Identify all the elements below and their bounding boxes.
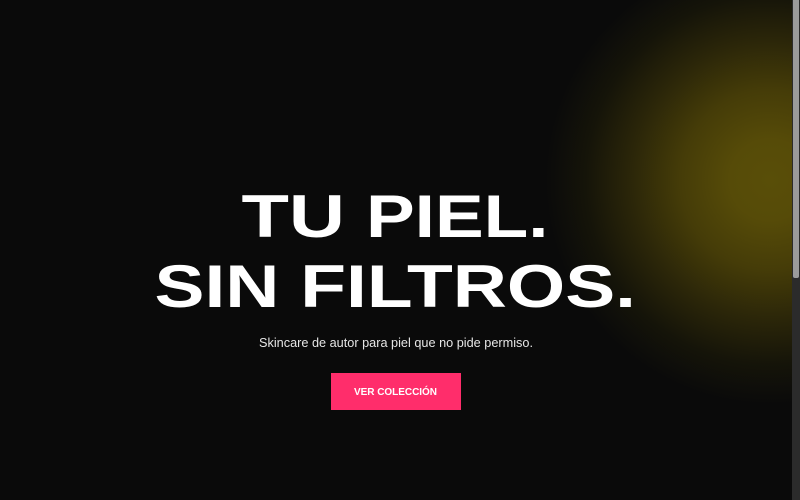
- headline: [154, 182, 636, 320]
- headline: SIN FILTROS.: [154, 252, 636, 320]
- button: ver colección: [331, 373, 461, 410]
- subtitle: Skincare de autor para piel que no pide permiso.: [259, 335, 533, 350]
- scrollbar track: [792, 0, 800, 500]
- headline: TU: [242, 182, 345, 250]
- button: ver colección: VER COLECCIÓN: [354, 385, 437, 398]
- scrollbar thumb: [793, 0, 799, 278]
- yellow glow: [545, 0, 800, 405]
- headline: PIEL.: [366, 182, 548, 250]
